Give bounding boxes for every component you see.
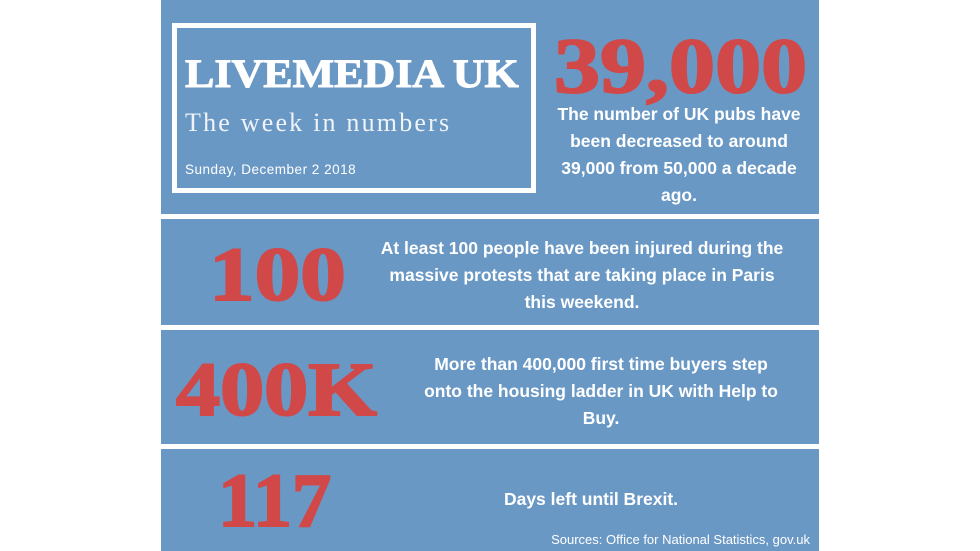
stat number: 100: 100	[209, 233, 346, 317]
subtitle: The week in numbers	[185, 108, 451, 137]
panel: header	[161, 0, 819, 214]
stat text: brexit: Days left until Brexit.	[504, 489, 678, 509]
stat text: protests: At least 100 people have been injured during the massive protests that are taking place in Paris this weekend.	[381, 238, 783, 312]
sources: Sources: Office for National Statistics, gov.uk	[551, 532, 810, 547]
stat text: pubs: The number of UK pubs have been decreased to around 39,000 from 50,000 a decade ago.	[557, 104, 801, 205]
stat number: 400K: 400K	[176, 348, 377, 432]
title box	[172, 23, 536, 193]
stat number: 39,000: 39,000	[554, 22, 807, 109]
stat number: 117: 117	[218, 459, 331, 543]
stat text: housing: More than 400,000 first time buyers step onto the housing ladder in UK with Help to Buy.	[424, 354, 778, 428]
panel: housing	[161, 330, 819, 444]
title: LIVEMEDIA UK	[185, 51, 519, 96]
panel: protests	[161, 219, 819, 325]
date: Sunday, December 2 2018	[185, 162, 356, 177]
panel: brexit	[161, 449, 819, 551]
